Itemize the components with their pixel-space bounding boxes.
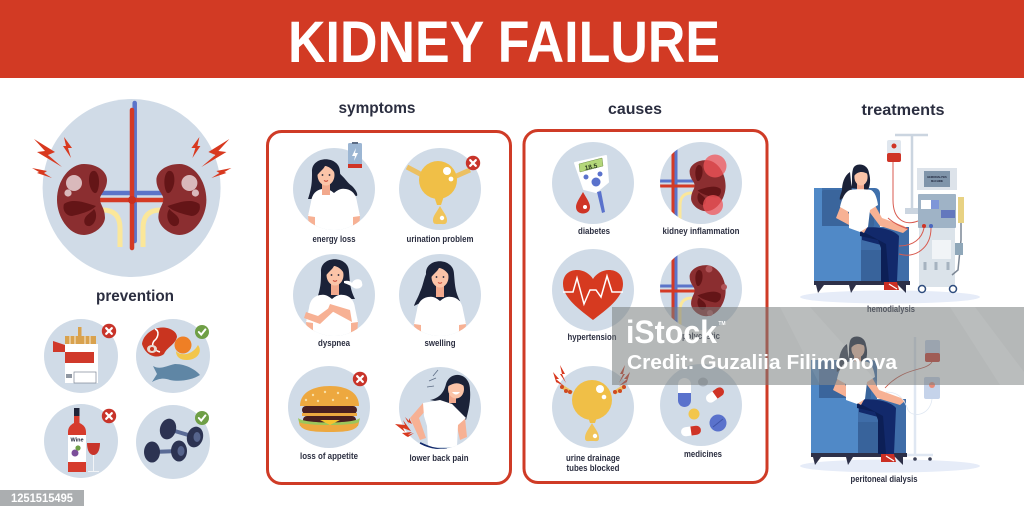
icon: wine: Wine <box>70 438 84 444</box>
watermark band: iStock <box>626 314 717 350</box>
symptom: lower back pain <box>395 367 481 463</box>
symptom: lower back pain: lower back pain <box>410 453 468 463</box>
watermark band: Credit: Guzaliia Filimonova <box>627 352 898 374</box>
cause: polycystic <box>660 246 742 341</box>
symptom: loss of appetite: loss of appetite <box>300 451 358 461</box>
image id tag <box>0 490 84 506</box>
label: peritoneal dialysis: peritoneal dialysis <box>850 474 918 484</box>
symptom: swelling: swelling <box>424 338 456 348</box>
symptom: urination problem <box>399 148 481 244</box>
symptom: urination problem: urination problem <box>406 234 474 244</box>
watermark band: TM <box>718 321 726 327</box>
header banner <box>0 0 1024 78</box>
label: hemodialysis: hemodialysis <box>867 304 915 314</box>
symptom: dyspnea: dyspnea <box>318 338 350 348</box>
panel: causes <box>524 130 767 482</box>
symptom: dyspnea <box>293 254 375 348</box>
symptom: swelling <box>399 254 481 348</box>
icon: healthy food <box>136 319 210 393</box>
treatment: peritoneal dialysis scene <box>800 336 980 484</box>
cause: hypertension <box>552 249 634 342</box>
image id tag: 1251515495 <box>11 493 74 505</box>
cause: urine drainage tubes blocked: urine drainage <box>566 453 620 463</box>
cause: urine drainage tubes blocked <box>552 365 634 473</box>
cause: urine drainage tubes blocked: tubes blocked <box>566 463 620 473</box>
icon: dumbbells <box>136 405 210 479</box>
heading: symptoms: symptoms <box>338 100 416 117</box>
icon: cigarettes <box>44 319 118 393</box>
cause: diabetes: diabetes <box>578 226 610 236</box>
symptom: energy loss <box>293 142 375 244</box>
panel: symptoms <box>268 132 510 484</box>
heading: treatments: treatments <box>862 102 944 119</box>
heading: causes: causes <box>608 101 662 118</box>
cause: medicines <box>660 364 742 459</box>
cause: medicines: medicines <box>684 449 722 459</box>
watermark band <box>612 307 1024 385</box>
icon: wine <box>44 404 118 478</box>
cause: kidney inflammation <box>660 140 742 236</box>
cause: hypertension: hypertension <box>568 332 616 342</box>
cause: diabetes <box>552 142 634 236</box>
symptom: loss of appetite <box>288 366 370 461</box>
kidney illustration <box>32 99 231 277</box>
treatment: hemodialysis scene: HEMODIALYSIS <box>927 175 947 179</box>
cause: polycystic: polycystic <box>682 331 720 341</box>
heading: prevention: prevention <box>96 288 174 305</box>
title: KIDNEY FAILURE <box>288 10 720 75</box>
treatment: hemodialysis scene <box>800 135 980 314</box>
treatment: hemodialysis scene: MACHINE <box>931 179 943 183</box>
cause: kidney inflammation: kidney inflammation <box>662 226 740 236</box>
symptom: energy loss: energy loss <box>312 234 356 244</box>
cause: diabetes: 18.5 <box>584 163 598 172</box>
